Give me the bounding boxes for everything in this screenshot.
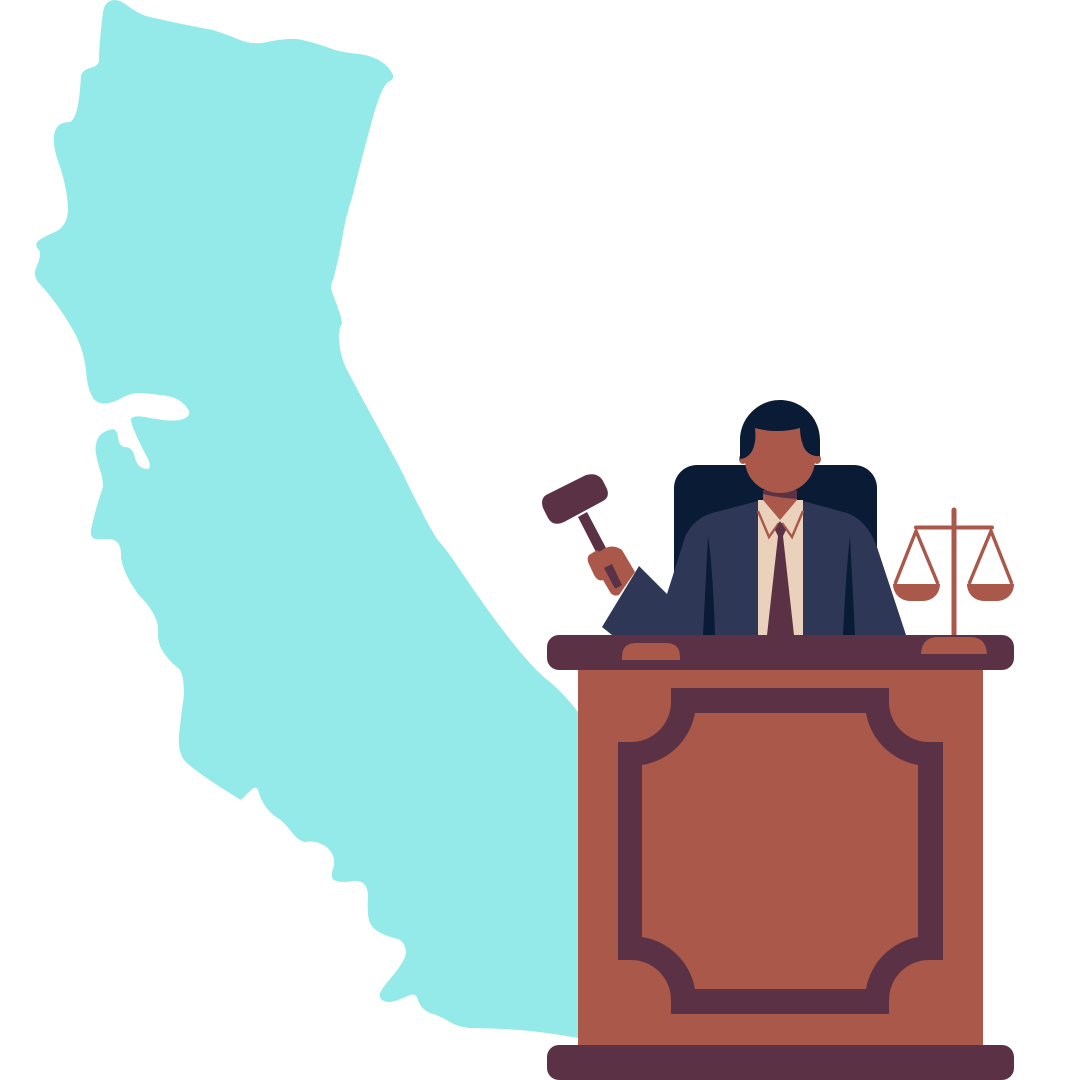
desk block left [622,643,680,660]
map: California silhouette [35,0,578,1038]
podium base [547,1045,1014,1080]
podium panel inset [642,713,918,989]
right scale strings [969,531,1012,584]
gavel handle [578,512,606,556]
robe [602,501,906,635]
desk block right [921,637,987,654]
tie [767,521,794,635]
face [745,420,815,493]
left pan [893,584,940,601]
neck shadow [763,490,797,499]
robe fold right [843,536,855,635]
scales of justice [893,510,1014,640]
collar lines [758,511,803,537]
chair back [674,465,877,645]
right pan [967,584,1014,601]
judge figure [602,400,906,635]
robe fold left [703,536,715,635]
judge hand [588,546,635,596]
gavel handle end [604,564,622,588]
podium panel frame [618,688,943,1014]
shirt [758,500,803,635]
left scale strings [895,531,938,584]
neck [763,490,797,520]
hair [740,400,820,459]
scale pole [952,510,956,640]
podium body [578,665,983,1050]
podium top bar [547,635,1014,670]
gavel head [542,474,608,524]
podium [547,635,1014,1080]
ears [739,454,747,464]
scale beam [916,526,992,530]
gavel and hand [542,474,635,596]
